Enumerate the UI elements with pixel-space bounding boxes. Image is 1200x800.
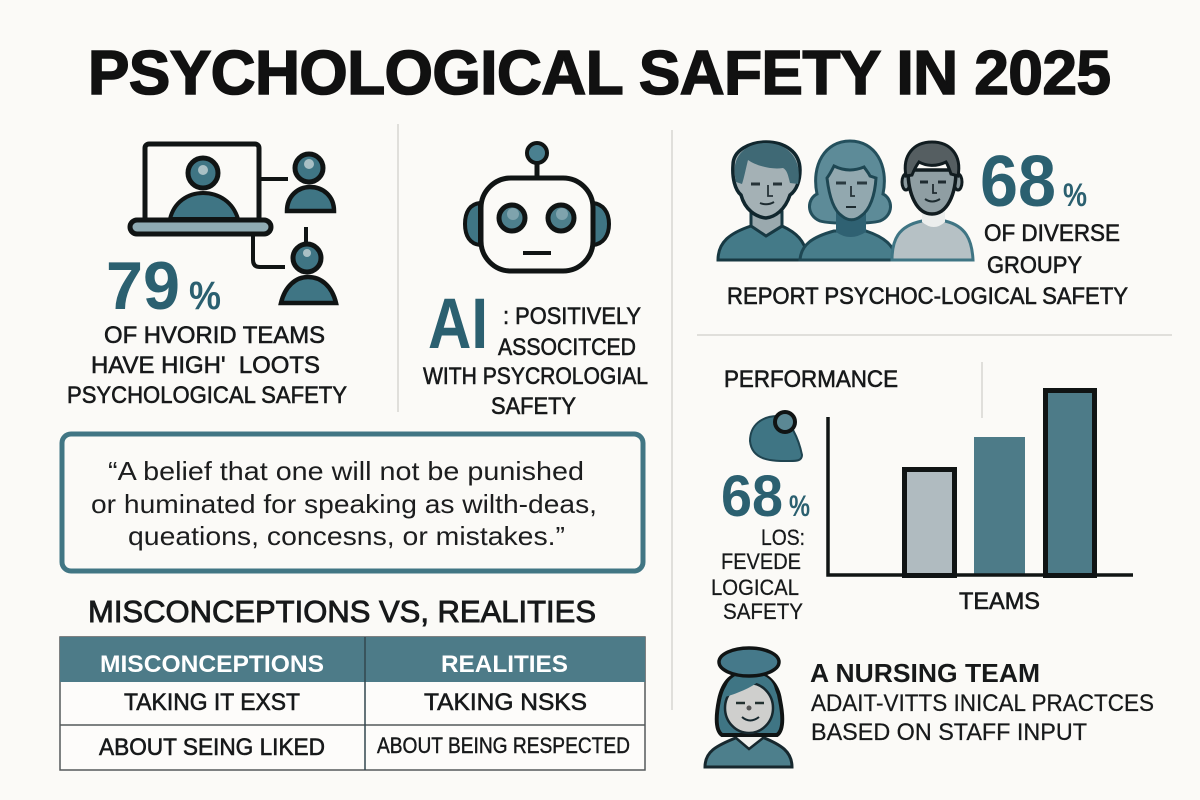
icon: teal bell shape (750, 412, 802, 461)
stat: 68 percent: % (789, 490, 810, 523)
table: misconceptions and realities (60, 637, 645, 770)
text: nursing team description: A NURSING TEAM (810, 658, 1040, 688)
table: misconceptions and realities: ABOUT SEING LIKED (99, 734, 325, 761)
callout: definition quote (62, 434, 643, 571)
text: hybrid teams description: HAVE HIGH' LOOTS (91, 352, 320, 379)
text: diverse groups description: REPORT PSYCHOC-LOGICAL SAFETY (727, 283, 1128, 310)
table: misconceptions and realities: REALITIES (441, 651, 568, 678)
heading: misconceptions vs realities: MISCONCEPTIONS VS, REALITIES (88, 594, 596, 629)
person: left man (718, 142, 808, 260)
table: misconceptions and realities: TAKING NSKS (424, 689, 587, 716)
icon: robot head (465, 143, 609, 271)
text: AI description: WITH PSYCROLOGIAL (423, 363, 648, 390)
text: hybrid teams description: OF HVORID TEAMS (104, 322, 325, 349)
text: nursing team description (810, 658, 1154, 746)
stat: 79 percent: 79 (106, 248, 180, 324)
axis label: teams: TEAMS (959, 588, 1040, 615)
text: AI description: SAFETY (491, 393, 576, 420)
text: diverse groups description: GROUPY (987, 252, 1082, 279)
panel: AI association (423, 143, 648, 420)
text: performance description: LOS: (761, 525, 805, 550)
panel: hybrid teams stat (67, 144, 347, 409)
panel: diverse groups stat (718, 141, 1128, 310)
title: PSYCHOLOGICAL SAFETY IN 2025 (88, 39, 1111, 108)
icon: three diverse people (718, 141, 973, 260)
text: performance description (711, 525, 805, 624)
text: hybrid teams description: PSYCHOLOGICAL SAFETY (67, 382, 347, 409)
panel: performance chart (711, 366, 1133, 624)
callout: definition quote: or huminated for speaking as wilth-deas, (91, 489, 597, 519)
text: hybrid teams description (67, 322, 347, 409)
table: misconceptions and realities: TAKING IT EXST (124, 689, 300, 716)
text: performance description: LOGICAL (711, 575, 799, 600)
stat: 68 percent: 68 (721, 464, 783, 529)
chart title: performance: PERFORMANCE (724, 366, 898, 393)
label: AI: AI (428, 285, 488, 364)
person: middle woman (800, 141, 897, 260)
person: right man (892, 142, 973, 260)
text: performance description: FEVEDE (721, 549, 801, 574)
stat: 79 percent (106, 248, 221, 324)
callout: definition quote: queations, concesns, or mistakes.” (128, 521, 565, 551)
text: nursing team description: BASED ON STAFF INPUT (811, 719, 1087, 746)
panel: nursing team example (705, 648, 1154, 767)
stat: 68 percent: 68 (980, 142, 1056, 222)
bar chart: performance by team (828, 390, 1133, 576)
text: AI description: ASSOCITCED (498, 334, 636, 361)
text: AI description: : POSITIVELY (503, 303, 641, 330)
text: performance description: SAFETY (723, 599, 803, 624)
text: AI description (423, 303, 648, 420)
stat: 68 percent: % (1063, 177, 1087, 213)
text: diverse groups description: OF DIVERSE (984, 220, 1120, 247)
stat: 79 percent: % (189, 274, 221, 318)
text: diverse groups description (727, 220, 1128, 310)
text: nursing team description: ADAIT-VITTS INICAL PRACTCES (811, 690, 1154, 717)
table: misconceptions and realities: MISCONCEPTIONS (100, 651, 324, 678)
callout: definition quote: “A belief that one will not be punished (108, 456, 584, 486)
icon: video call with remote team members (130, 144, 336, 303)
icon: nurse (705, 648, 792, 767)
table: misconceptions and realities: ABOUT BEING RESPECTED (377, 733, 630, 758)
